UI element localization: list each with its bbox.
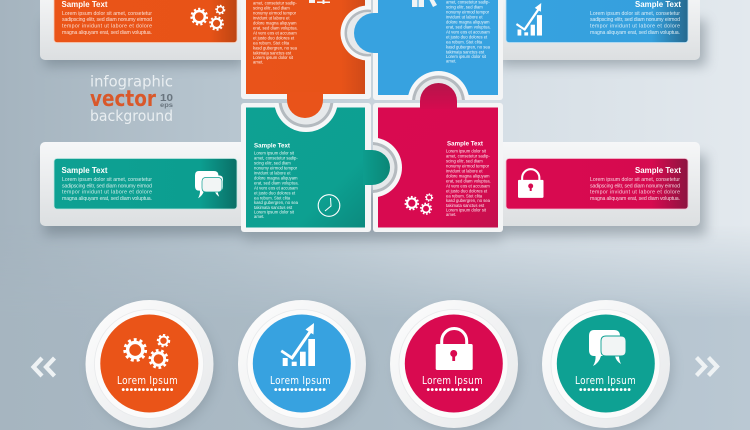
puzzle piece: orange — [241, 0, 371, 99]
puzzle piece: teal: scing elitr, sed diam — [254, 160, 291, 166]
icon: clock — [318, 195, 340, 216]
text block: top left — [62, 11, 152, 36]
title: infographic vector background: vector — [90, 87, 156, 112]
circle button: chart — [238, 300, 368, 430]
heading: middle right: Sample Text — [635, 165, 681, 175]
puzzle piece: crimson: invidunt ut labore et — [446, 168, 483, 174]
puzzle piece: blue: erat, sed diam voluptua. — [446, 24, 491, 30]
puzzle piece: teal: Sample Text — [254, 142, 290, 150]
puzzle piece: teal: kasd gubergren, no sea — [254, 200, 299, 205]
title: infographic vector background: background — [90, 107, 173, 125]
text block: middle left: tempor invidunt ut labore et dolore — [62, 190, 152, 196]
text block: middle left: magna aliquyam erat, sed diam voluptua. — [62, 196, 152, 202]
puzzle piece: orange: dolore magna aliquyam — [253, 20, 297, 26]
puzzle piece: blue: ea rebum. Stet clita — [446, 40, 483, 44]
text block: middle right: magna aliquyam erat, sed diam voluptua. — [590, 196, 680, 202]
icon: speech bubbles — [195, 171, 223, 198]
icon: padlock — [518, 169, 544, 198]
puzzle piece: orange: erat, sed diam voluptua. — [253, 26, 298, 30]
dots: chart: ••••••••••••• — [274, 385, 327, 396]
puzzle piece: crimson: Lorem ipsum dolor sit — [446, 148, 487, 154]
title: infographic vector background: eps — [160, 103, 174, 109]
icon: rising chart — [516, 3, 542, 36]
panel: middle right crimson — [490, 142, 700, 226]
text block: middle right: sadipscing elitr, sed diam nonumy eirmod — [590, 183, 680, 189]
circle button: gears — [86, 300, 215, 430]
text block: top right: magna aliquyam erat, sed diam voluptua. — [590, 30, 680, 36]
dots: lock: ••••••••••••• — [426, 385, 480, 396]
text block: middle right: Lorem ipsum dolor sit amet, consetetur — [590, 177, 680, 183]
puzzle piece: teal: dolore magna aliquyam — [254, 176, 298, 180]
puzzle piece: blue: nonumy eirmod tempor — [446, 10, 490, 14]
puzzle piece: blue: takimata sanctus est — [446, 50, 485, 54]
puzzle piece: crimson: Lorem ipsum dolor sit — [446, 208, 487, 212]
puzzle piece: blue — [354, 0, 503, 100]
puzzle piece: orange: et justo duo dolores et — [253, 36, 295, 40]
puzzle tabs — [287, 83, 457, 185]
label: lock: Lorem Ipsum — [422, 374, 483, 387]
arrow: right chevrons — [696, 358, 717, 376]
icon: chat large — [589, 330, 626, 366]
label: chat: Lorem Ipsum — [575, 374, 636, 387]
text block: middle right — [590, 177, 680, 202]
puzzle piece: crimson: takimata sanctus est — [446, 203, 485, 208]
text block: middle left — [62, 177, 152, 202]
text block: top right: Lorem ipsum dolor sit amet, consetetur — [590, 11, 680, 17]
puzzle piece: teal: At vero eos et accusam — [254, 186, 298, 190]
text block: middle left: Lorem ipsum dolor sit amet, consetetur — [62, 177, 152, 183]
puzzle piece: teal: erat, sed diam voluptua. — [254, 180, 299, 186]
puzzle piece: blue: scing elitr, sed diam — [446, 4, 483, 10]
panel: middle left teal — [40, 142, 255, 226]
puzzle piece: teal: et justo duo dolores et — [254, 190, 296, 196]
puzzle piece: crimson: nonumy eirmod tempor — [446, 164, 490, 168]
puzzle piece: crimson: Sample Text — [447, 140, 483, 148]
puzzle piece: crimson: ea rebum. Stet clita — [446, 194, 483, 198]
label: chart: Lorem Ipsum — [270, 374, 331, 387]
puzzle piece: teal: Lorem ipsum dolor sit — [254, 150, 295, 156]
puzzle piece: crimson: et justo duo dolores et — [446, 188, 488, 194]
puzzle piece: blue: kasd gubergren, no sea — [446, 44, 491, 50]
panel: top left orange — [40, 0, 255, 60]
puzzle piece: orange: nonumy eirmod tempor — [253, 10, 297, 16]
puzzle piece: blue: invidunt ut labore et — [446, 14, 483, 20]
panel shadows — [44, 20, 706, 240]
puzzle piece: blue: Lorem ipsum dolor sit — [446, 54, 487, 59]
puzzle piece: blue: dolore magna aliquyam — [446, 20, 490, 24]
circle button: chat — [542, 300, 672, 430]
puzzle piece: teal: amet, consetetur sadip- — [254, 156, 298, 160]
puzzle piece: orange: scing elitr, sed diam — [253, 6, 290, 10]
puzzle piece: orange: ea rebum. Stet clita — [253, 40, 290, 46]
puzzle piece: teal: takimata sanctus est — [254, 205, 293, 210]
text block: top right: tempor invidunt ut labore et dolore — [590, 24, 680, 30]
puzzle piece: orange: At vero eos et accusam — [253, 30, 297, 36]
icon: small gears — [405, 194, 433, 214]
text block: top right: sadipscing elitr, sed diam nonumy eirmod — [590, 17, 680, 23]
puzzle piece: orange: takimata sanctus est — [253, 50, 292, 56]
text block: top left: tempor invidunt ut labore et dolore — [62, 24, 152, 30]
text block: top left: Lorem ipsum dolor sit amet, consetetur — [62, 11, 152, 17]
puzzle piece: orange: kasd gubergren, no sea — [253, 46, 298, 50]
puzzle piece: teal — [241, 103, 371, 232]
puzzle piece: orange: amet, consetetur sadip- — [253, 0, 297, 6]
text block: top left: sadipscing elitr, sed diam nonumy eirmod — [62, 17, 152, 23]
puzzle piece: crimson: amet. — [446, 212, 456, 217]
puzzle piece: orange: amet. — [253, 60, 263, 64]
icon: lock large — [436, 328, 473, 370]
puzzle piece: crimson: amet, consetetur sadip- — [446, 154, 490, 158]
text block: middle left: sadipscing elitr, sed diam nonumy eirmod — [62, 183, 152, 189]
puzzle piece: teal: Lorem ipsum dolor sit — [254, 210, 295, 214]
heading: middle left: Sample Text — [62, 165, 108, 175]
text block: middle right: tempor invidunt ut labore et dolore — [590, 190, 680, 196]
panel: top right blue — [490, 0, 700, 60]
icon: chart large — [280, 323, 315, 366]
icon: gears large — [125, 335, 169, 368]
puzzle piece: teal: nonumy eirmod tempor — [254, 166, 298, 170]
title: infographic vector background — [90, 72, 174, 125]
dots: chat: ••••••••••••• — [579, 385, 632, 396]
icon: gears — [191, 5, 225, 30]
arrow: left chevrons — [34, 358, 54, 376]
puzzle piece: crimson: scing elitr, sed diam — [446, 158, 483, 164]
title: infographic vector background: 10 — [160, 92, 173, 104]
dots: gears: ••••••••••••• — [122, 385, 174, 396]
puzzle piece: crimson: erat, sed diam voluptua. — [446, 178, 491, 184]
puzzle piece: crimson: dolore magna aliquyam — [446, 174, 490, 178]
text block: top right — [590, 11, 680, 36]
puzzle piece: crimson — [373, 103, 503, 232]
puzzle piece: orange: Lorem ipsum dolor sit — [253, 55, 294, 60]
puzzle: four piece jigsaw — [241, 0, 503, 232]
title: infographic vector background: infographic — [90, 72, 173, 90]
puzzle piece: orange: invidunt ut labore et — [253, 16, 290, 20]
puzzle piece: teal: amet. — [254, 214, 264, 219]
puzzle piece: teal: invidunt ut labore et — [254, 170, 291, 176]
label: gears: Lorem Ipsum — [117, 374, 178, 387]
puzzle piece: blue: At vero eos et accusam — [446, 30, 490, 34]
puzzle piece: blue: amet. — [446, 58, 456, 64]
puzzle piece: crimson: At vero eos et accusam — [446, 184, 490, 188]
text block: top left: magna aliquyam erat, sed diam voluptua. — [62, 30, 152, 36]
puzzle piece: teal: ea rebum. Stet clita — [254, 196, 291, 200]
circle button: lock — [390, 300, 520, 430]
puzzle piece: blue: et justo duo dolores et — [446, 34, 488, 40]
puzzle piece: crimson: kasd gubergren, no sea — [446, 198, 491, 203]
